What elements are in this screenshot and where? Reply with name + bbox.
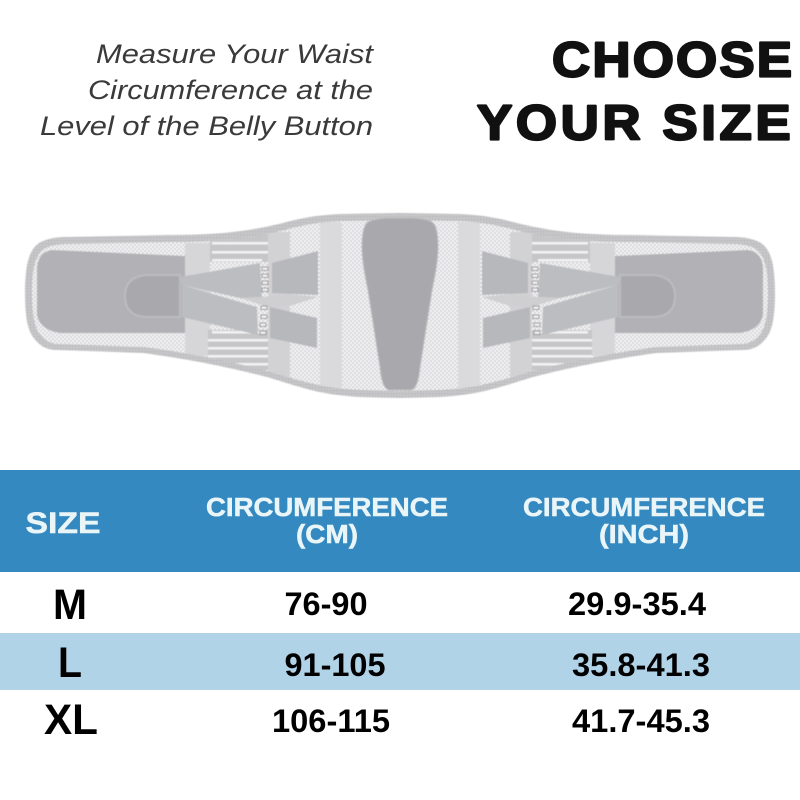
belt mesh lining	[32, 220, 768, 391]
row L: 35.8-41.3	[572, 647, 710, 683]
row L: 91-105	[284, 647, 386, 683]
instruction text: Measure Your Waist	[96, 39, 375, 69]
row XL: 41.7-45.3	[572, 703, 710, 739]
instruction text	[40, 39, 375, 141]
right side panel, straps and springs	[458, 222, 763, 392]
title	[477, 32, 794, 150]
row L: L	[58, 639, 82, 687]
row M: 76-90	[284, 586, 368, 622]
header text	[26, 494, 765, 549]
row M: 29.9-35.4	[568, 586, 706, 622]
belt body	[25, 213, 775, 398]
size rows	[44, 581, 710, 744]
table header band	[0, 470, 800, 572]
header text: SIZE	[26, 507, 100, 540]
row M: M	[53, 581, 87, 629]
row XL: 106-115	[272, 703, 390, 739]
title: YOUR SIZE	[477, 95, 794, 150]
header text: CIRCUMFERENCE	[206, 494, 448, 522]
back support belt	[25, 213, 775, 398]
highlighted row background	[0, 633, 800, 690]
row XL	[44, 696, 710, 744]
left side panel, straps and springs	[37, 222, 342, 392]
row M	[53, 581, 706, 629]
title: CHOOSE	[552, 32, 794, 87]
instruction text: Circumference at the	[88, 75, 373, 105]
row L	[58, 639, 710, 687]
centre lumbar pad	[362, 218, 438, 390]
header text: (INCH)	[599, 521, 689, 549]
row XL: XL	[44, 696, 98, 744]
header text: CIRCUMFERENCE	[523, 494, 765, 522]
header text: (CM)	[296, 521, 358, 549]
instruction text: Level of the Belly Button	[40, 111, 373, 141]
